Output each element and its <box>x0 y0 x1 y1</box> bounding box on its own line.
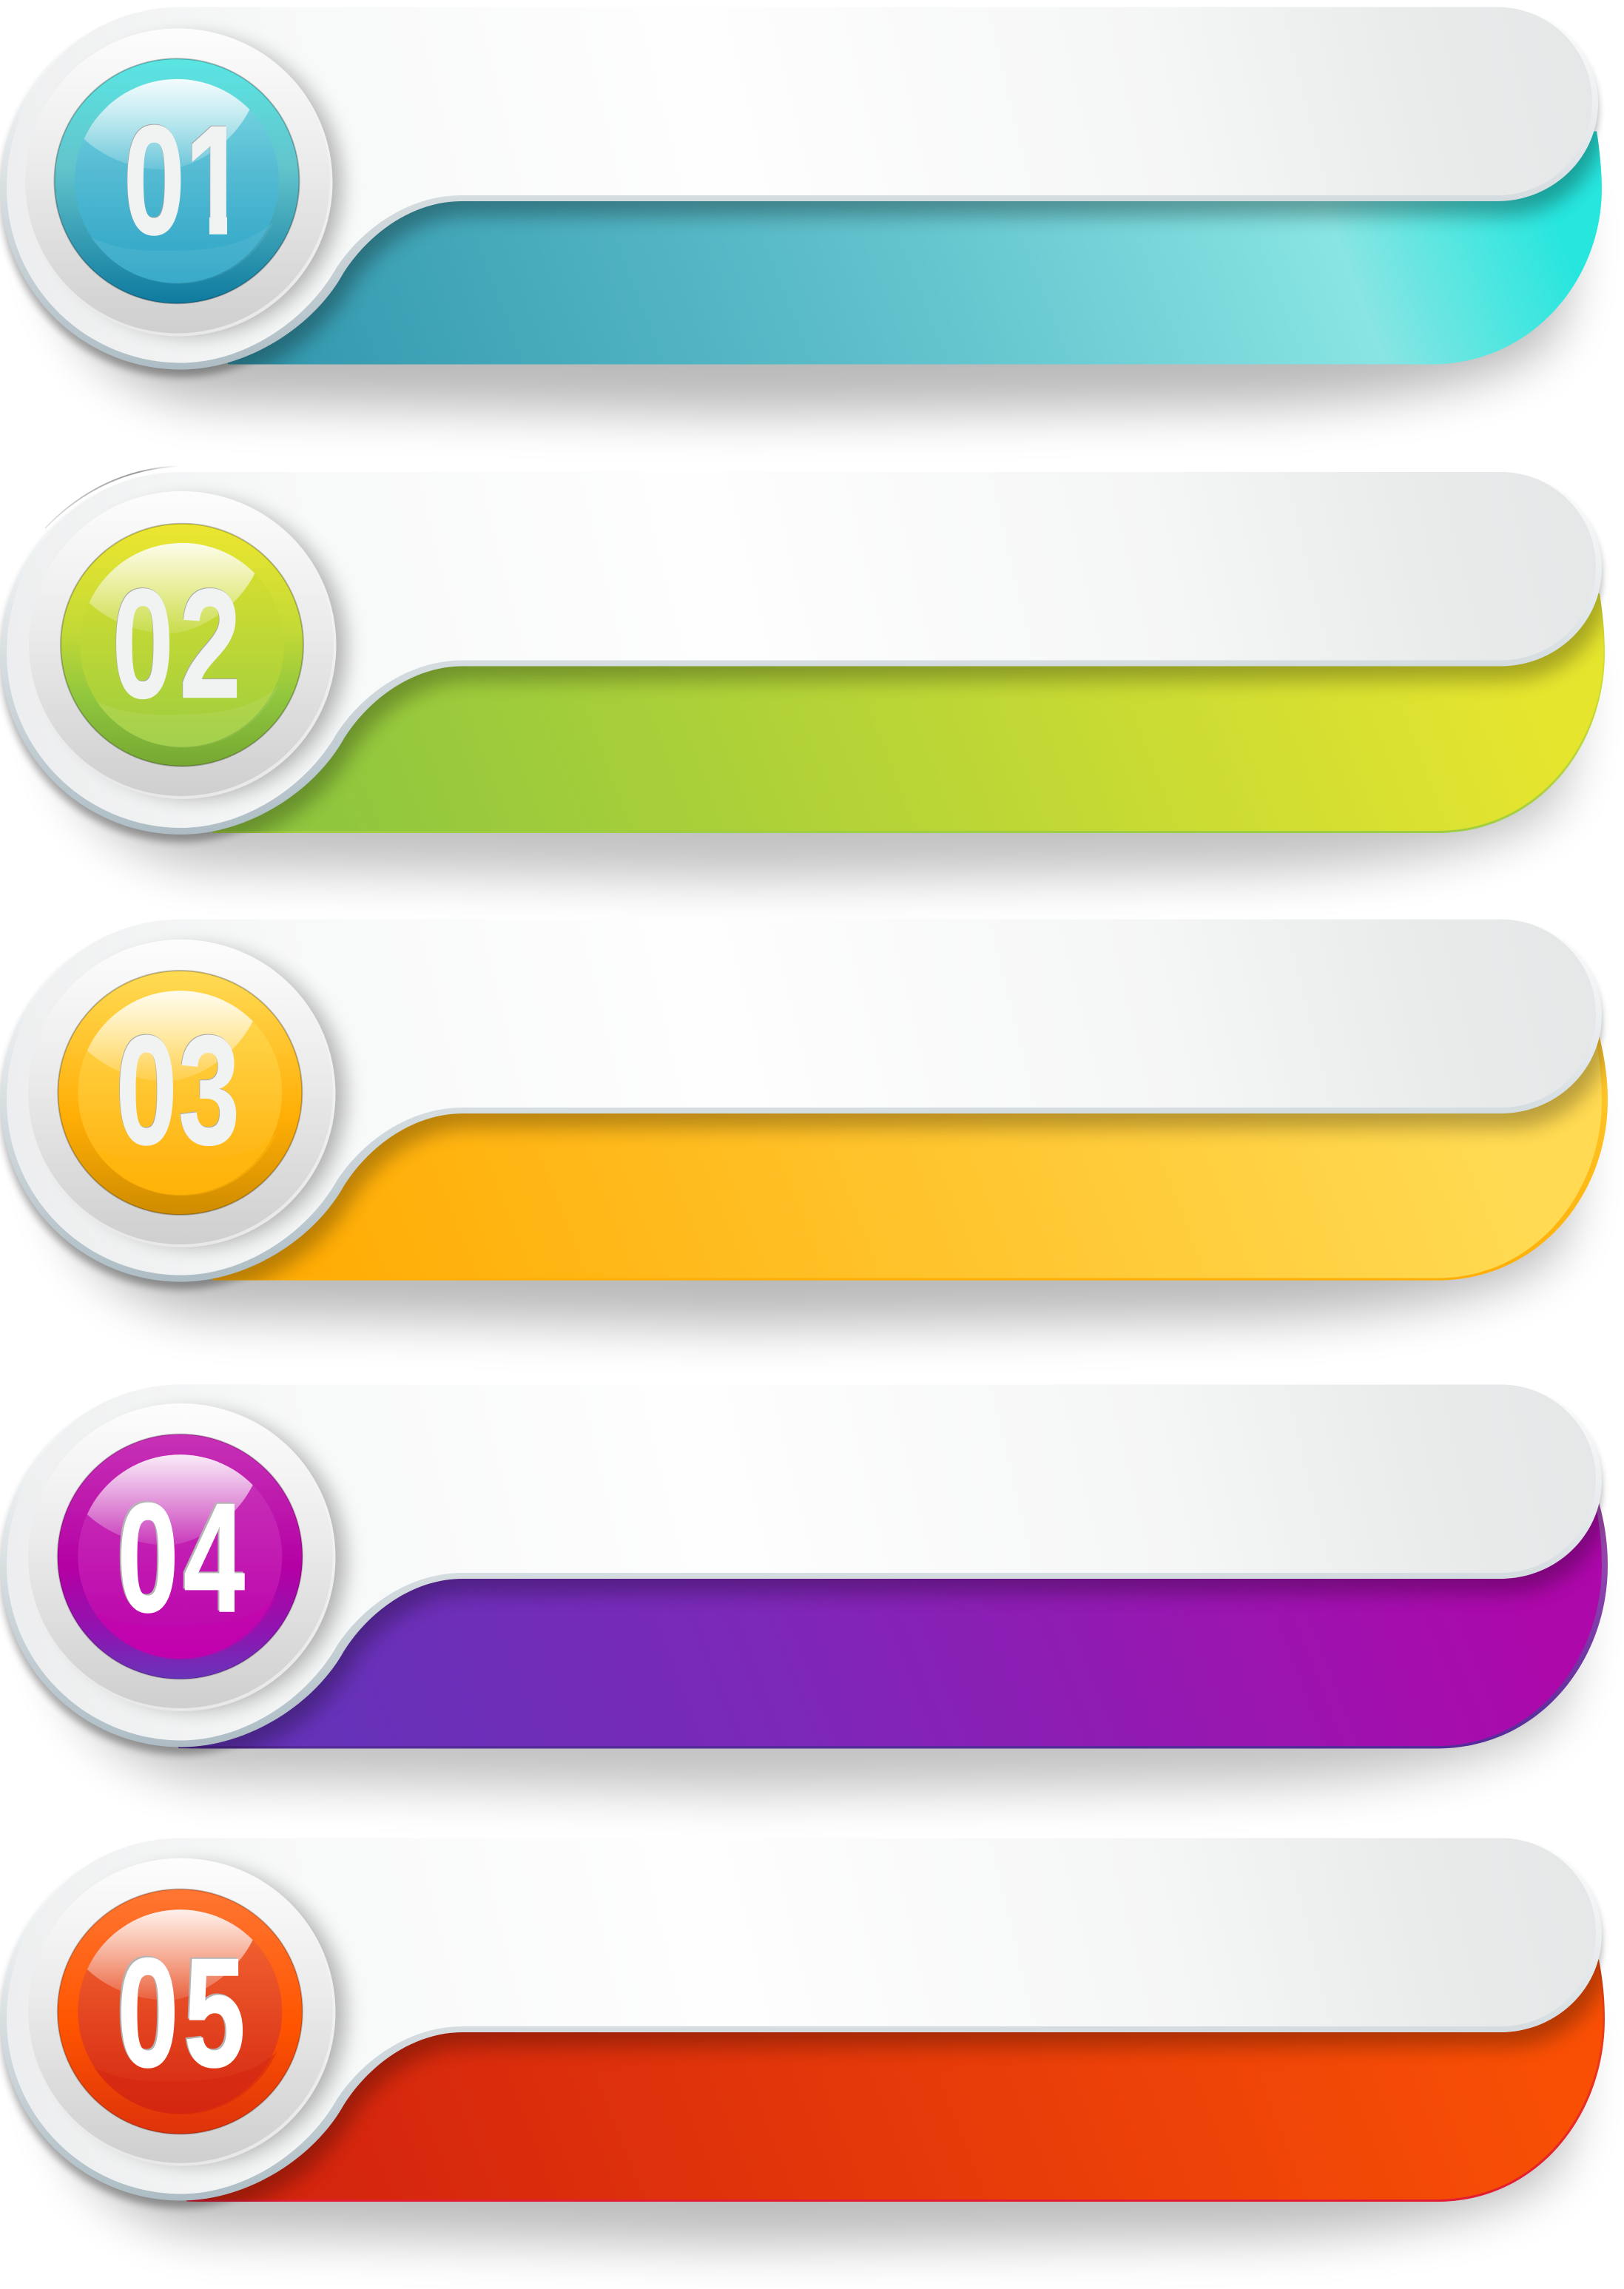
glossy ball 02 <box>61 524 303 766</box>
glossy ball 01 <box>55 58 299 303</box>
banner 01 <box>1 7 1606 414</box>
number 02: 02 <box>112 556 241 730</box>
white tab 03 <box>1 920 1602 1282</box>
white tab 05 <box>1 1838 1602 2200</box>
number 04: 04 <box>118 1471 245 1645</box>
drop shadow 05 <box>1 1845 1602 2245</box>
number 01: 01 <box>124 93 246 267</box>
glossy ball 04 <box>58 1434 303 1679</box>
banner 05 <box>1 1838 1609 2245</box>
drop shadow 01 <box>1 15 1598 414</box>
number 05: 05 <box>118 1926 246 2100</box>
disc 03 <box>28 940 336 1247</box>
glossy ball 05 <box>58 1889 303 2134</box>
white tab 01 <box>1 7 1598 370</box>
glossy ball 03 <box>58 971 302 1215</box>
colored band 03 <box>8 934 1609 1297</box>
colored band 02 <box>212 593 1605 833</box>
drop shadow 02 <box>1 479 1602 879</box>
white tab 04 <box>1 1385 1602 1747</box>
banner 03 <box>1 920 1609 1326</box>
drop shadow 04 <box>1 1392 1602 1792</box>
drop shadow 03 <box>1 927 1602 1326</box>
colored band 01 <box>228 131 1602 364</box>
disc 02 <box>28 491 336 799</box>
banner 02 <box>1 466 1609 879</box>
disc 01 <box>25 28 333 336</box>
white tab 02 <box>1 466 1602 835</box>
number 03: 03 <box>116 1003 240 1177</box>
colored band 05 <box>8 1853 1609 2215</box>
disc 05 <box>28 1858 336 2166</box>
banner 04 <box>1 1385 1609 1792</box>
disc 04 <box>28 1403 336 1711</box>
colored band 04 <box>8 1400 1609 1762</box>
